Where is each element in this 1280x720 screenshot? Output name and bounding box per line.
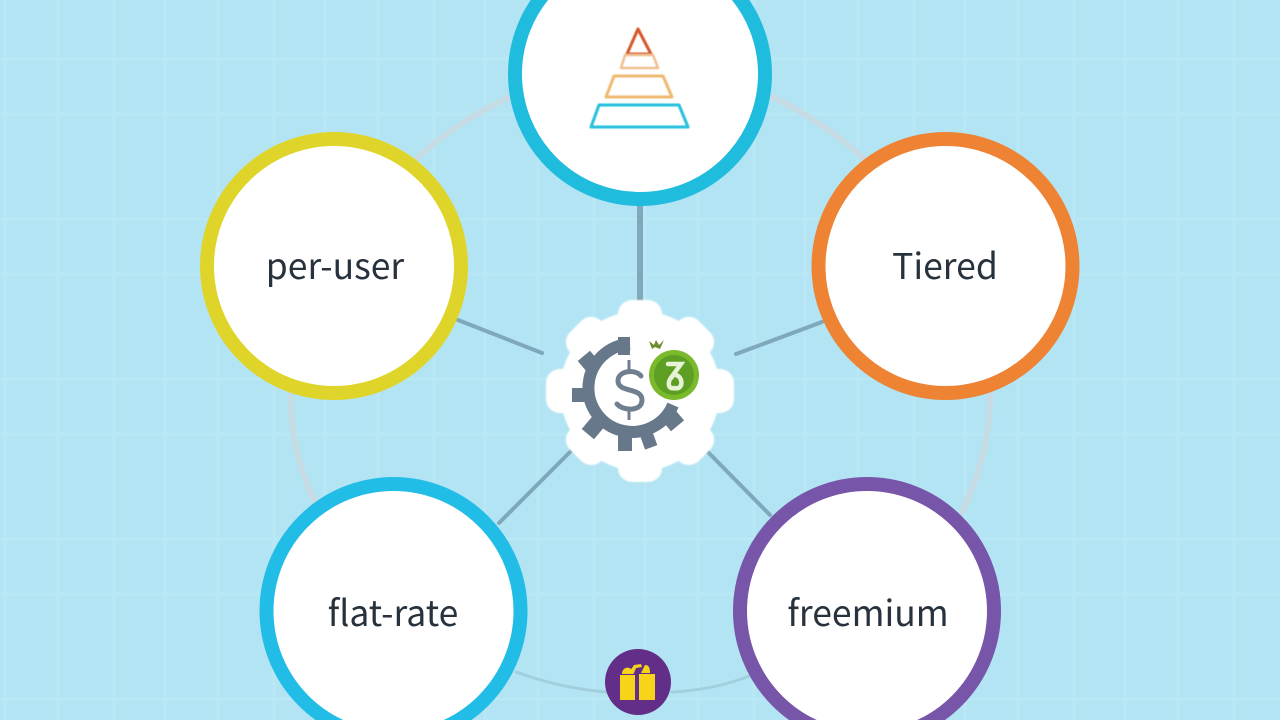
dollar sign xyxy=(617,372,642,409)
node: per-user xyxy=(207,139,461,393)
white gear xyxy=(546,300,734,482)
node: per-user: per-user xyxy=(266,239,404,290)
node: pyramid xyxy=(515,0,765,199)
central gear badge xyxy=(546,300,734,482)
node: flat-rate: flat-rate xyxy=(328,586,458,637)
node: freemium xyxy=(740,484,994,720)
icon: pyramid xyxy=(591,29,688,127)
node: tiered xyxy=(818,139,1072,393)
outer ring segments xyxy=(291,96,990,692)
icon: gift boxes xyxy=(620,664,655,700)
node: freemium: freemium xyxy=(787,586,949,637)
icon: green coin xyxy=(649,340,699,400)
node: tiered: Tiered xyxy=(892,239,998,290)
node: flat-rate xyxy=(266,484,520,720)
connector lines xyxy=(458,206,822,523)
icon: gray gear xyxy=(572,337,684,451)
gift badge xyxy=(605,649,671,715)
